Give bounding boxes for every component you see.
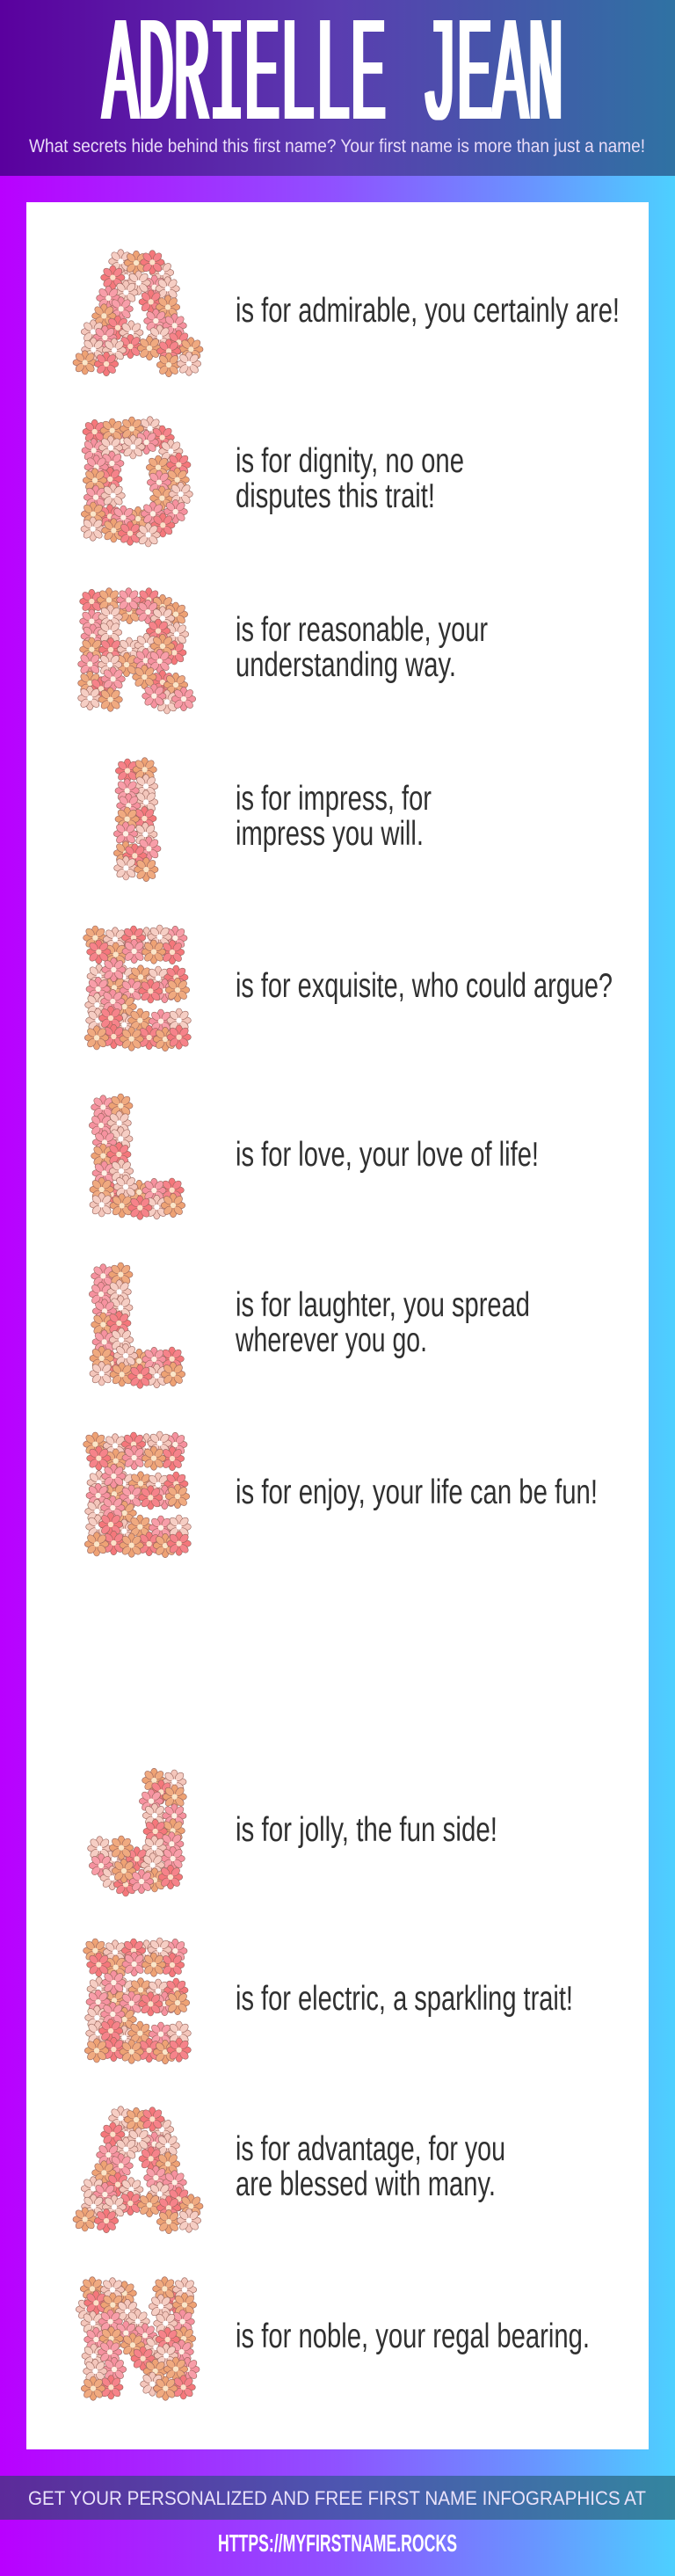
footer call to action: GET YOUR PERSONALIZED AND FREE FIRST NAME INFOGRAPHICS AT	[28, 2487, 646, 2509]
text: R line: is for reasonable, your	[236, 611, 488, 649]
text: R line: understanding way.	[236, 646, 456, 684]
icon: flower letter I	[113, 758, 161, 882]
icon: flower letter E second	[83, 1431, 191, 1558]
text: I line	[236, 780, 432, 853]
text: R line	[236, 611, 488, 684]
header band	[0, 0, 675, 176]
text: A second line: are blessed with many.	[236, 2165, 496, 2203]
footer url: HTTPS://MYFIRSTNAME.ROCKS	[218, 2529, 457, 2557]
text: J line: is for jolly, the fun side!	[236, 1811, 497, 1849]
icon: flower letter R	[78, 588, 196, 714]
text: I line: is for impress, for	[236, 780, 432, 818]
text: L second line: is for laughter, you spread	[236, 1286, 530, 1324]
text: D line: is for dignity, no one	[236, 442, 464, 480]
text: A second line	[236, 2130, 505, 2203]
icon: flower letter L second	[89, 1263, 185, 1388]
icon: flower letter N	[76, 2277, 200, 2400]
text: L line: is for love, your love of life!	[236, 1136, 539, 1174]
icon: flower letter D	[81, 417, 192, 547]
text: D line	[236, 442, 464, 515]
text: L second line	[235, 1286, 530, 1359]
icon: flower letter E	[83, 925, 191, 1052]
icon: flower letter E third	[83, 1938, 191, 2064]
text: A second line: is for advantage, for you	[236, 2130, 505, 2168]
icon: flower letter A	[73, 250, 203, 377]
text: L second line: wherever you go.	[235, 1321, 427, 1359]
icon: flower letter J	[88, 1768, 186, 1896]
text: I line: impress you will.	[236, 815, 424, 853]
icon: flower letter L	[89, 1094, 185, 1219]
footer band	[0, 2476, 675, 2520]
icon: flower letter A second	[73, 2107, 203, 2234]
text: D line: disputes this trait!	[236, 477, 435, 515]
